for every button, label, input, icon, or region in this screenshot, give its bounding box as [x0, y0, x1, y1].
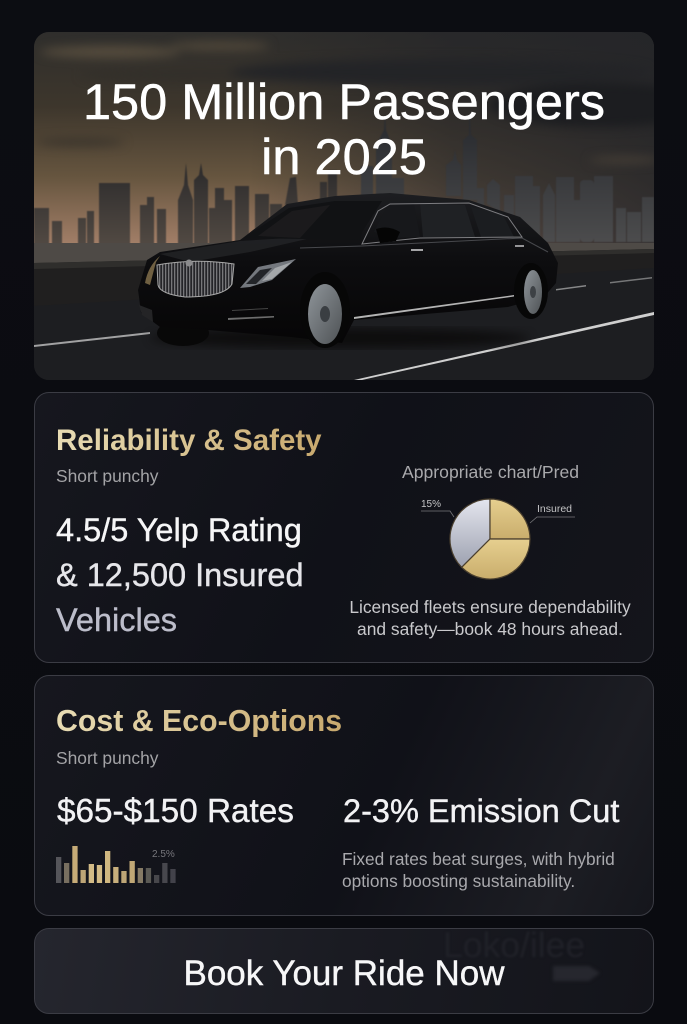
gold slice top — [490, 499, 530, 539]
windshield — [244, 201, 382, 240]
hero panel: limousine and skyline — [34, 32, 654, 380]
title — [83, 73, 605, 185]
window chrome — [362, 203, 522, 244]
sky — [34, 32, 654, 247]
limousine — [138, 193, 558, 348]
label insured: Insured — [537, 503, 572, 515]
emission statistic: 2-3% Emission Cut — [343, 793, 619, 829]
belt line highlight — [300, 238, 548, 252]
bar label: 2.5% — [152, 849, 175, 860]
road — [34, 268, 654, 380]
ghost text: Loko/ilee — [443, 925, 585, 965]
description — [349, 597, 631, 639]
water — [34, 243, 654, 265]
description: and safety—book 48 hours ahead. — [357, 619, 623, 639]
gold slice bottom — [462, 539, 530, 579]
silver slice — [450, 499, 490, 567]
bar chart — [56, 846, 176, 883]
description: Licensed fleets ensure dependability — [349, 597, 631, 617]
hero illustration — [34, 32, 654, 380]
panel: reliability and safety — [34, 392, 654, 663]
description: options boosting sustainability. — [342, 871, 575, 891]
rear wheel — [514, 263, 548, 319]
subheading: Short punchy — [56, 466, 158, 486]
hidden front wheel — [157, 320, 209, 346]
heading: Cost & Eco-Options — [56, 705, 342, 738]
pie chart — [421, 498, 575, 580]
button label: Book Your Ride Now — [183, 954, 505, 993]
key statistic — [56, 512, 304, 638]
chart title: Appropriate chart/Pred — [402, 462, 579, 482]
door handles — [411, 249, 423, 251]
hood highlight — [160, 236, 320, 262]
badge — [186, 260, 192, 266]
sill chrome — [354, 295, 514, 319]
mirror — [376, 228, 400, 243]
bumper trim — [228, 316, 274, 320]
label 15% — [421, 499, 454, 517]
description — [342, 849, 615, 891]
rates statistic: $65-$150 Rates — [57, 793, 294, 830]
title: in 2025 — [261, 128, 427, 185]
ghost arrow — [553, 966, 598, 981]
panel: cost and eco-options — [34, 675, 654, 916]
description: Fixed rates beat surges, with hybrid — [342, 849, 615, 869]
grille — [157, 261, 234, 297]
side windows — [374, 204, 420, 238]
label 15%: 15% — [421, 499, 441, 510]
road markings — [34, 277, 654, 380]
key statistic: & 12,500 Insured — [56, 557, 304, 593]
subheading: Short punchy — [56, 748, 158, 768]
barrier — [34, 249, 654, 306]
shadow — [150, 328, 530, 348]
key statistic: Vehicles — [56, 602, 177, 638]
heading: Reliability & Safety — [56, 424, 322, 457]
title: 150 Million Passengers — [83, 73, 605, 130]
key statistic: 4.5/5 Yelp Rating — [56, 512, 302, 548]
body — [138, 193, 558, 343]
clouds — [36, 42, 687, 163]
front wheel — [300, 272, 350, 348]
call to action button — [34, 928, 654, 1014]
label insured — [530, 503, 575, 523]
skyline — [34, 163, 337, 246]
headlight — [240, 259, 296, 288]
